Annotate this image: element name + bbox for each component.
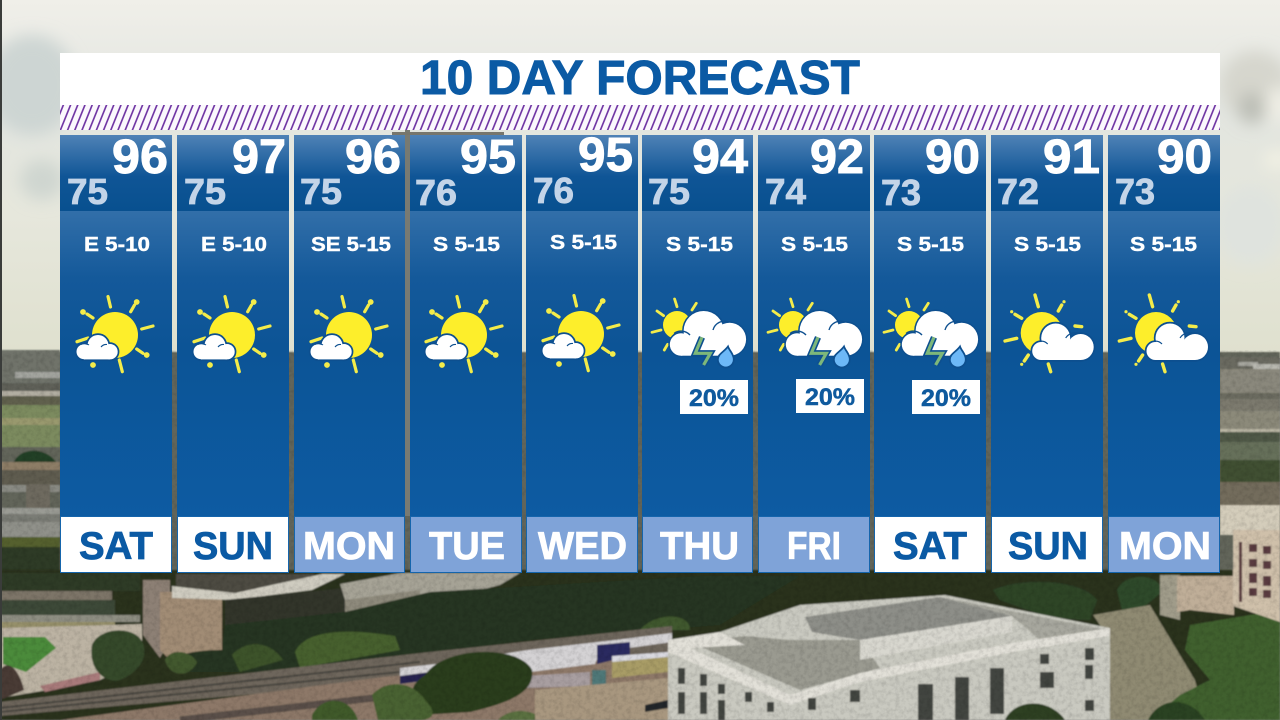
panel: Sunday: E 5-10 (201, 234, 267, 256)
panel: Monday: SE 5-15 (311, 234, 391, 256)
panel: Friday: 20% (805, 384, 855, 411)
panel: second Saturday (874, 131, 986, 573)
tree belt (172, 576, 800, 672)
purple hatched band (60, 105, 1220, 130)
panel: Thursday: 20% (689, 385, 739, 412)
title: 10 DAY FORECAST (420, 52, 860, 105)
hotel tower (1177, 576, 1234, 615)
panel: second Sunday: 72 (997, 171, 1039, 212)
panel: Monday (294, 131, 405, 573)
panel: Tuesday: 76 (415, 172, 457, 213)
panel: Sunday: 97 (232, 131, 286, 184)
panel: second Monday (1108, 131, 1220, 573)
panel: Friday: 74 (765, 171, 806, 212)
panel: Saturday: 96 (112, 131, 168, 184)
panel: Wednesday: 95 (578, 129, 633, 182)
panel: Wednesday (526, 129, 638, 573)
union station building (668, 595, 1110, 720)
panel: Thursday: S 5-15 (666, 234, 733, 256)
panel: Sunday (177, 131, 289, 573)
panel: second Saturday: SAT (893, 525, 967, 568)
panel: second Sunday: 91 (1043, 131, 1100, 184)
panel: Saturday: SAT (79, 525, 153, 568)
foliage and photo grain (0, 350, 1280, 720)
panel: Saturday: E 5-10 (84, 234, 150, 256)
panel: Tuesday: S 5-15 (433, 234, 500, 256)
panel: Sunday: SUN (193, 525, 273, 568)
road and lawn at left (0, 573, 140, 591)
panel: Monday: MON (303, 525, 395, 568)
rail tracks (0, 626, 672, 716)
panel: Friday: 92 (810, 131, 864, 184)
panel: Thursday: THU (660, 525, 739, 568)
panel: Monday: 96 (345, 131, 401, 184)
panel: Wednesday: S 5-15 (550, 232, 617, 254)
panel: Saturday: 75 (67, 171, 108, 212)
commuter train (400, 633, 672, 684)
far trees and road on the right (993, 582, 1097, 620)
station canopies (525, 672, 590, 688)
convention centre building (143, 580, 170, 658)
panel: second Saturday: 90 (925, 131, 980, 184)
panel: Sunday: 75 (184, 171, 226, 212)
panel: second Monday: S 5-15 (1130, 234, 1197, 256)
panel: second Saturday: 20% (921, 385, 971, 412)
sky with clouds (0, 0, 1280, 358)
panel: Tuesday: 95 (460, 131, 516, 184)
panel: second Monday: 73 (1115, 171, 1155, 212)
panel: Friday (758, 131, 870, 573)
panel: Thursday (642, 131, 753, 573)
panel: second Monday: 90 (1157, 131, 1212, 184)
distant city and fields (0, 350, 1280, 582)
tall tower seen through the gap (405, 130, 410, 516)
foreground ground and buildings (0, 505, 1280, 720)
panel: Tuesday (410, 131, 522, 573)
panel: second Saturday: S 5-15 (897, 234, 964, 256)
panel: Friday: FRI (787, 525, 841, 568)
panel: Friday: S 5-15 (781, 234, 848, 256)
panel: second Monday: MON (1119, 525, 1211, 568)
panel: Wednesday: 76 (533, 170, 574, 211)
panel: Thursday: 94 (692, 131, 748, 184)
panel: Wednesday: WED (538, 525, 627, 568)
panel: second Sunday: S 5-15 (1014, 234, 1081, 256)
panel: Monday: 75 (300, 171, 342, 212)
title banner (60, 52, 1220, 105)
trees in front of tracks (412, 652, 532, 715)
panel: second Sunday (991, 131, 1103, 573)
panel: Thursday: 75 (648, 171, 690, 212)
panel: second Saturday: 73 (881, 172, 921, 213)
panel: Saturday (60, 131, 172, 573)
panel: second Sunday: SUN (1008, 525, 1088, 568)
panel: Tuesday: TUE (429, 525, 505, 568)
